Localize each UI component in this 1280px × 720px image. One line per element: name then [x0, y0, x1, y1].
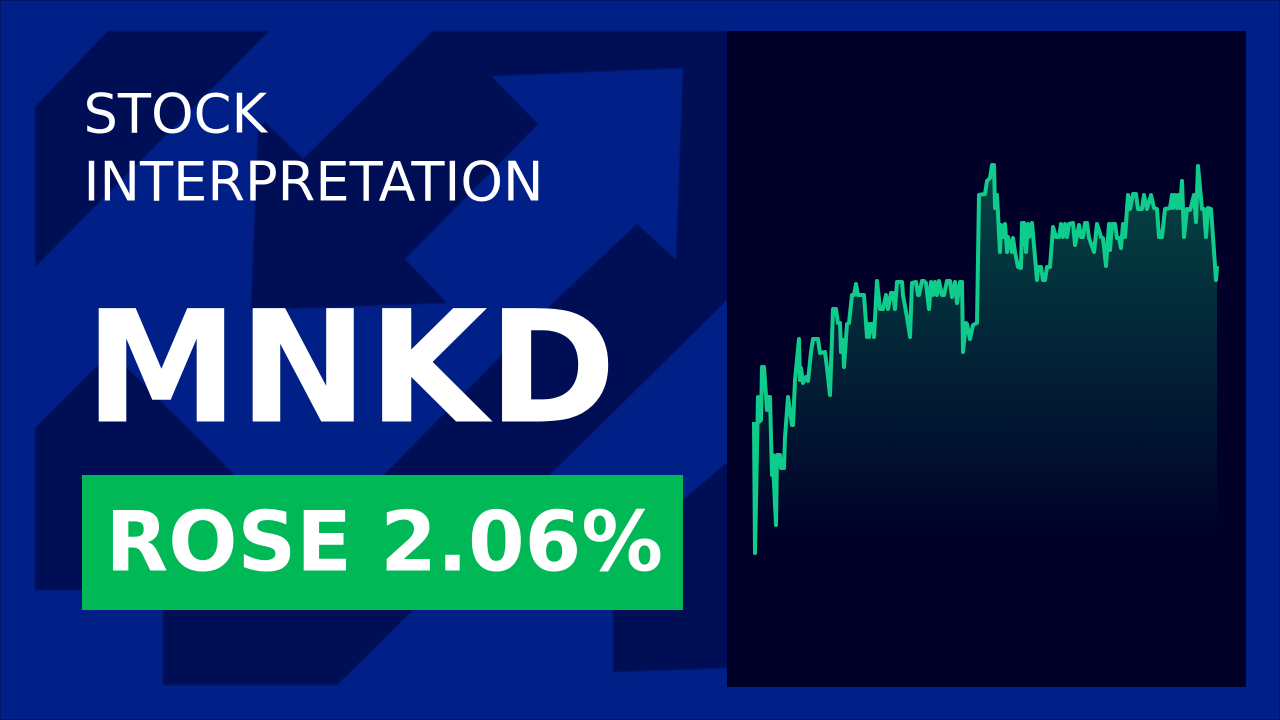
price line	[754, 165, 1217, 553]
heading: stock interpretation: INTERPRETATION	[84, 150, 544, 214]
heading: stock interpretation	[84, 82, 544, 214]
price area fill	[754, 165, 1217, 553]
change value: ROSE 2.06%	[106, 495, 663, 591]
chart panel	[727, 31, 1246, 687]
change badge	[82, 475, 683, 610]
ticker symbol: MNKD	[84, 277, 616, 459]
background arrows pattern	[35, 31, 730, 685]
heading: stock interpretation: STOCK	[84, 82, 268, 146]
